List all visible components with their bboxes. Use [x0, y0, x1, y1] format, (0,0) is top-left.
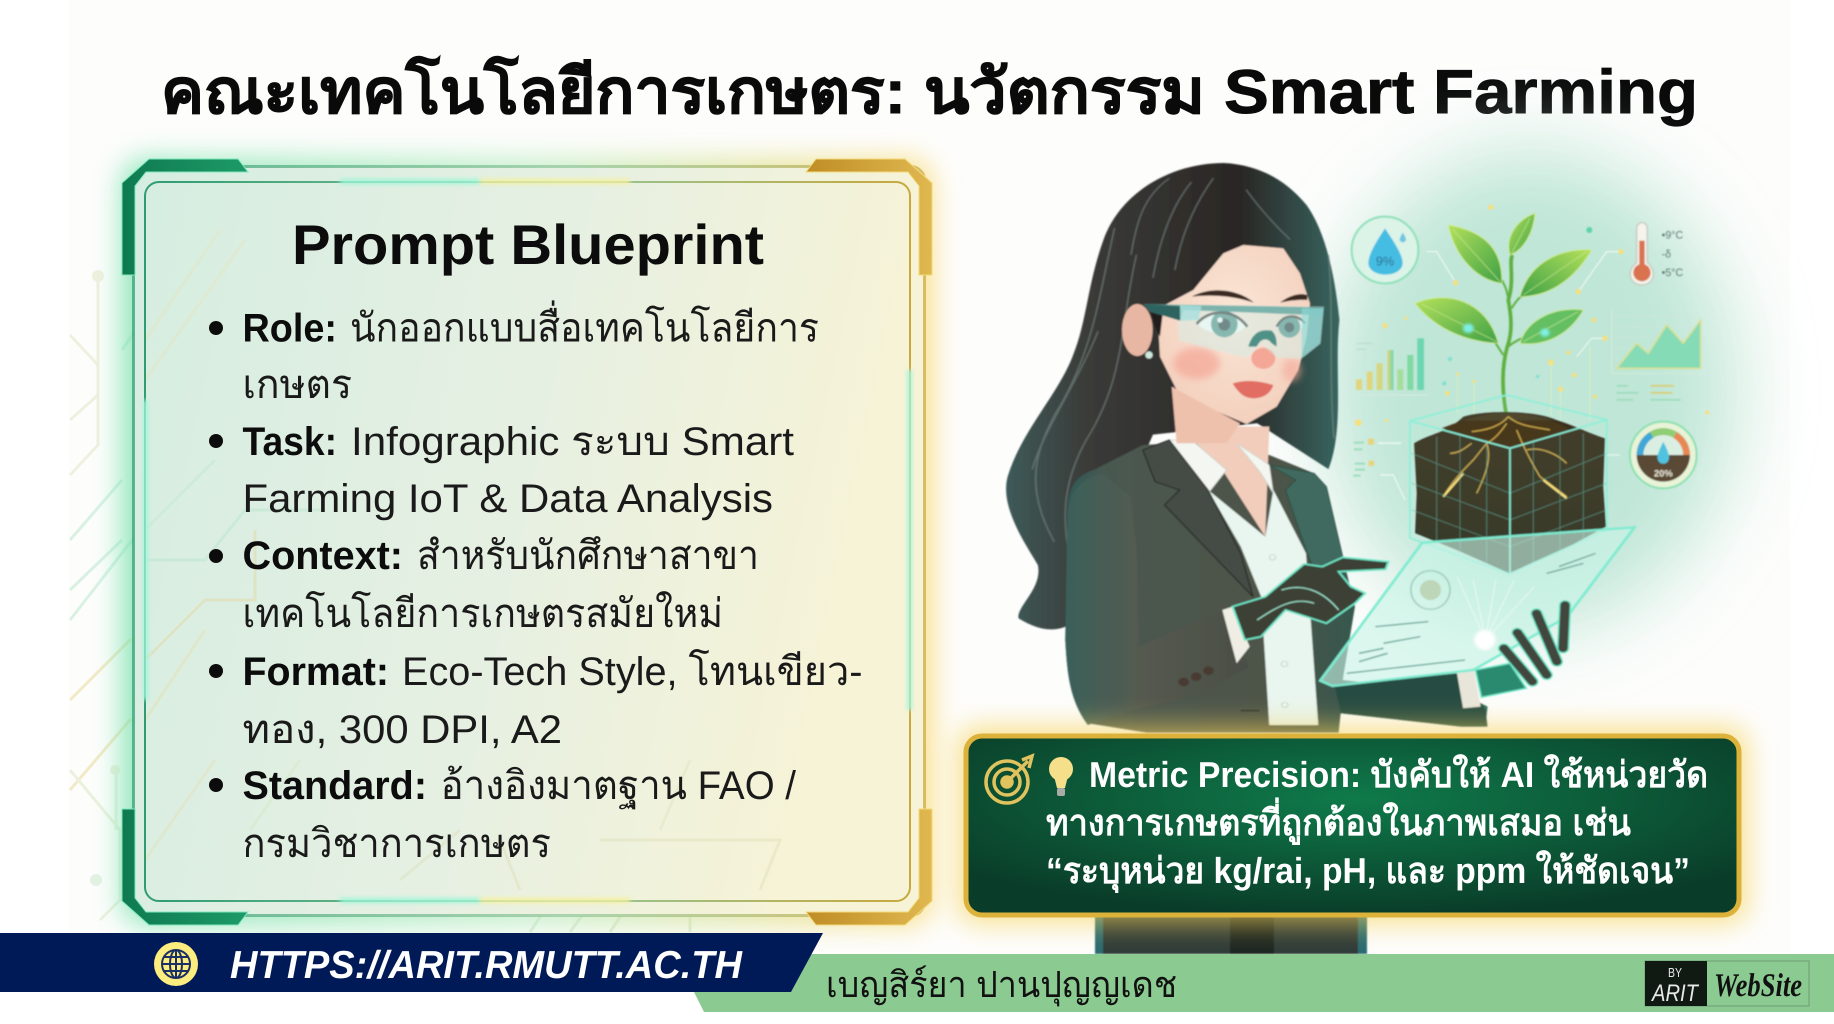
- light streaks: [143, 179, 912, 903]
- illustration: scientist and smart farming hologram: [1006, 163, 1709, 733]
- icon: thermometer: -δ: [1662, 248, 1671, 260]
- icon: thermometer: •5°C: [1662, 266, 1683, 278]
- leaf veins: [1422, 218, 1587, 342]
- footer: author bar: [693, 954, 1834, 1012]
- bullet: task: Task:: [242, 420, 337, 464]
- nose: [1251, 348, 1275, 369]
- panel inner line: [145, 182, 910, 901]
- panel: prompt blueprint: [122, 159, 932, 925]
- bullet: task: Infographic ระบบ Smart: [351, 420, 794, 464]
- logo: BY: [1668, 965, 1682, 980]
- callout box: [966, 736, 1739, 915]
- icon: soil moisture gauge: 20%: [1654, 468, 1673, 479]
- neck skin: [1180, 427, 1269, 537]
- panel glow: [122, 159, 932, 925]
- shirt buttons: [1269, 555, 1288, 708]
- url text: HTTPS://ARIT.RMUTT.AC.TH: [230, 944, 743, 987]
- bullet: context: สำหรับนักศึกษาสาขา: [417, 534, 759, 578]
- bullet: standard: กรมวิชาการเกษตร: [242, 822, 551, 866]
- left eye: [1197, 311, 1247, 337]
- tablet: [1320, 527, 1634, 686]
- head: [1122, 245, 1323, 443]
- title: นวัตกรรม: [924, 58, 1205, 127]
- icon: water drop badge: 9%: [1376, 255, 1394, 269]
- vertical light lines: [1458, 347, 1590, 420]
- illustration: hologram glow background: [1325, 150, 1735, 630]
- footer: url bar: [0, 933, 823, 992]
- icon: thermometer: [1630, 223, 1683, 285]
- icon: light bulb: [1049, 757, 1073, 796]
- title: คณะเทคโนโลยีการเกษตร:: [161, 55, 906, 127]
- bullet: task: [209, 420, 794, 521]
- neck shade: [1172, 387, 1240, 443]
- logo: [1645, 961, 1809, 1007]
- icon: soil cube: [1410, 395, 1607, 574]
- bullet: context: [209, 534, 759, 636]
- panel heading: Prompt Blueprint: [292, 213, 764, 276]
- panel outer line: [134, 166, 924, 916]
- leaves: [1448, 225, 1502, 283]
- eyebrows: [1192, 290, 1307, 303]
- right cuff: [1457, 667, 1481, 708]
- callout text: Metric Precision: บังคับให้ AI ใช้หน่วยวัด: [1089, 754, 1708, 795]
- torso: [1065, 427, 1488, 733]
- data readouts: [1353, 385, 1681, 477]
- shirt collar: [1169, 440, 1273, 493]
- icon: soil moisture gauge: [1630, 422, 1697, 488]
- logo: WebSite: [1714, 968, 1802, 1004]
- leaf sparkles: [1463, 324, 1474, 333]
- lips: [1233, 381, 1273, 398]
- panel inner circuit traces: [145, 230, 780, 890]
- icon: line chart: [1612, 310, 1707, 373]
- icon: sprout: [1415, 213, 1592, 417]
- background circuit pattern: [70, 250, 790, 932]
- shirt cuff: [1222, 607, 1250, 663]
- callout: metric precision: [958, 727, 1747, 923]
- icon: globe: [154, 942, 198, 986]
- icon: bar chart: [1350, 335, 1430, 395]
- left glove: [1233, 557, 1388, 640]
- callout: metric precision: ทางการเกษตรที่ถูกต้องในภาพเสมอ เช่น: [1046, 797, 1631, 845]
- title: Smart Farming: [1224, 58, 1698, 127]
- hologram: [1350, 205, 1709, 574]
- panel corners: [122, 159, 932, 925]
- sleeve buttons: [1178, 666, 1214, 686]
- hair: [1006, 163, 1339, 629]
- bullet: format: ทอง, 300 DPI, A2: [242, 708, 562, 752]
- author name: เบญสิร์ยา ปานปุญญเดช: [826, 964, 1177, 1007]
- left sleeve: [1065, 473, 1249, 725]
- cheeks: [1173, 347, 1220, 379]
- glowing particles: [1355, 205, 1709, 426]
- bullet: format: Format:: [242, 650, 389, 694]
- logo: ARIT: [1650, 980, 1700, 1007]
- right eye: [1277, 316, 1305, 338]
- left lapel: [1143, 440, 1253, 597]
- jacket bottom below callout: [1095, 915, 1367, 954]
- bullet: role: นักออกแบบสื่อเทคโนโลยีการ: [350, 300, 819, 350]
- right lapel: [1269, 465, 1343, 590]
- icon: target: [986, 756, 1032, 803]
- bullet: role: [209, 300, 819, 407]
- icon: water drop badge: [1352, 217, 1418, 283]
- panel fill: [134, 167, 924, 916]
- earring: [1145, 351, 1153, 359]
- ear: [1122, 304, 1153, 356]
- title: [161, 55, 1698, 127]
- right glove: [1475, 605, 1565, 697]
- bullet: context: Context:: [242, 534, 403, 578]
- face: [1158, 245, 1310, 424]
- jacket: [1065, 440, 1488, 733]
- bullet: standard: อ้างอิงมาตฐาน FAO /: [440, 764, 797, 810]
- sideburn: [1150, 308, 1163, 337]
- bullet: role: เกษตร: [242, 363, 352, 407]
- bullet: standard: [209, 764, 797, 866]
- callout: metric precision: “ระบุหน่วย kg/rai, pH, และ ppm ให้ชัดเจน”: [1046, 850, 1690, 893]
- bullet: context: เทคโนโลยีการเกษตรสมัยใหม่: [242, 590, 723, 636]
- icon: thermometer: •9°C: [1662, 229, 1683, 241]
- shirt: [1208, 490, 1318, 725]
- tablet and hands: [1233, 527, 1634, 727]
- bullet: format: [209, 648, 862, 752]
- bullet: role: Role:: [242, 306, 337, 350]
- bullet list: [209, 300, 862, 866]
- callout glow: [958, 727, 1747, 923]
- bullet: task: Farming IoT & Data Analysis: [242, 477, 773, 521]
- jacket pocket: [1241, 709, 1259, 713]
- connector lines: [1380, 252, 1620, 500]
- right jacket sleeve: [1335, 673, 1488, 727]
- bullet: standard: Standard:: [242, 764, 427, 808]
- safety glasses: [1143, 304, 1323, 358]
- bullet: format: Eco-Tech Style, โทนเขียว-: [402, 648, 862, 694]
